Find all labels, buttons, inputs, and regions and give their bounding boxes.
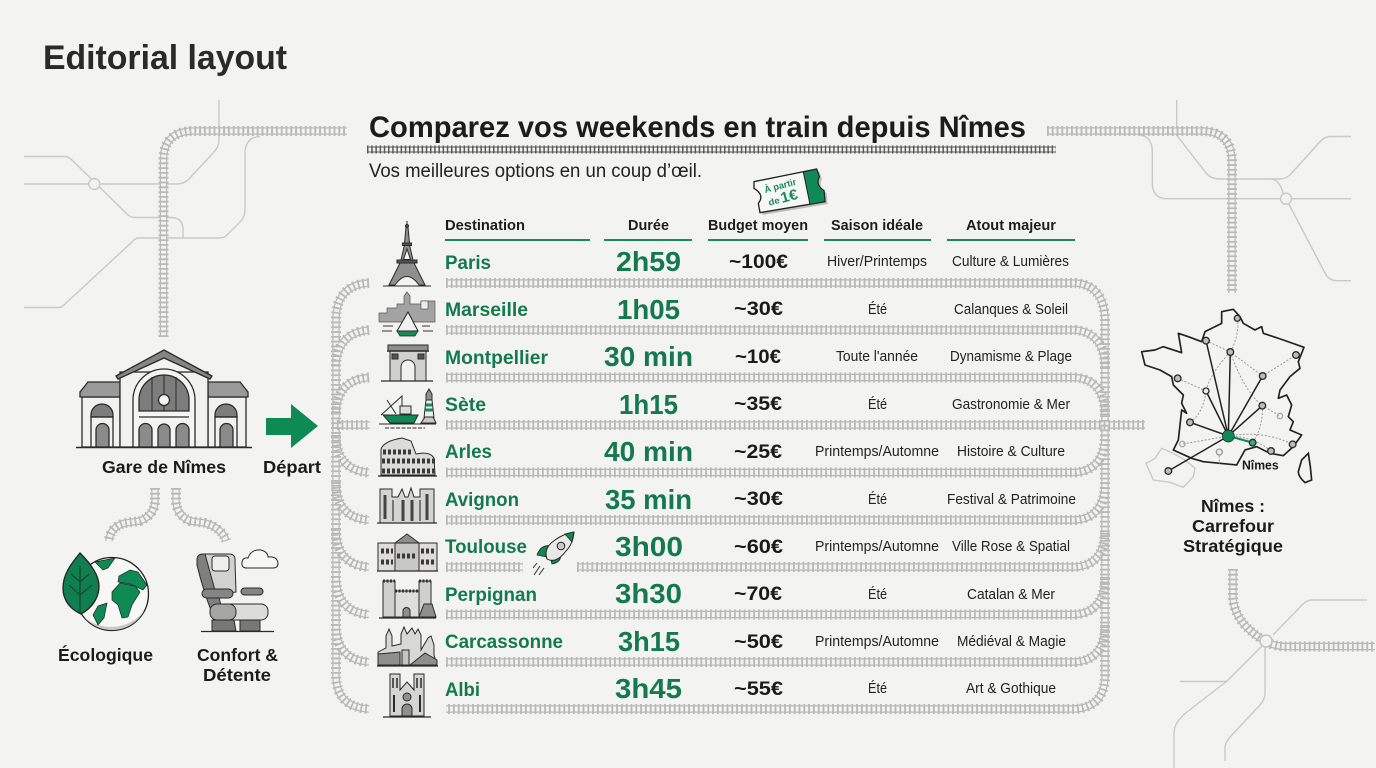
ticket badge: à partir de 1€: 1€ — [779, 187, 800, 207]
label: Écologique: Écologique — [58, 644, 153, 665]
row: Perpignan — [379, 578, 1055, 618]
icon: Gare de Nîmes station — [76, 350, 252, 448]
label: Départ: Départ — [263, 457, 321, 477]
ticket badge: à partir de 1€: À partir — [763, 177, 798, 195]
season: Été — [868, 680, 887, 697]
icon: triumphal arch — [381, 345, 433, 381]
table header: Atout majeur — [966, 217, 1056, 234]
icon: fishing boat and lighthouse — [379, 389, 436, 428]
highlight: Dynamisme & Plage — [950, 349, 1072, 365]
icon: Palais des Papes — [377, 488, 437, 523]
label: Gare de Nîmes: Gare de Nîmes — [102, 457, 226, 477]
highlight: Calanques & Soleil — [954, 302, 1068, 318]
neighbouring region outline — [1146, 448, 1195, 487]
budget: ~30€ — [734, 489, 783, 510]
season: Été — [868, 491, 887, 508]
row: Montpellier — [381, 341, 1072, 381]
highlight: Histoire & Culture — [957, 444, 1065, 460]
season: Été — [868, 586, 887, 603]
season: Hiver/Printemps — [827, 254, 927, 270]
destination name: Albi — [445, 680, 480, 701]
icon: medieval walled city — [377, 627, 438, 666]
destination name: Sète — [445, 395, 486, 416]
budget: ~60€ — [734, 537, 783, 558]
destination name: Toulouse — [445, 537, 527, 558]
row: Carcassonne — [377, 626, 1066, 666]
background transit network: top right — [1140, 100, 1351, 281]
destination name: Carcassonne — [445, 632, 563, 653]
icon: Marseille harbour and sailboat — [379, 292, 435, 336]
arrow: departure — [266, 404, 318, 448]
icon: leaf and globe — [63, 553, 148, 630]
destination name: Montpellier — [445, 348, 549, 369]
budget: ~30€ — [734, 299, 783, 320]
label: Confort & Détente: Confort & — [197, 645, 278, 665]
highlight: Art & Gothique — [966, 681, 1056, 697]
icon: Eiffel Tower — [383, 221, 431, 286]
title underline rail — [367, 146, 1056, 152]
heading: Editorial layout: Editorial layout — [43, 39, 287, 77]
highlight: Catalan & Mer — [967, 587, 1055, 603]
row: Marseille — [379, 292, 1068, 336]
row: Toulouse — [377, 531, 1070, 575]
ticket badge: à partir de 1€ — [754, 169, 828, 215]
budget: ~70€ — [734, 584, 782, 605]
season: Printemps/Automne — [815, 539, 939, 555]
row: Sète — [379, 389, 1070, 428]
background transit network: bottom right — [1174, 600, 1367, 768]
duration: 2h59 — [616, 246, 681, 277]
duration: 3h30 — [615, 578, 682, 609]
row: Arles — [378, 436, 1065, 476]
season: Toute l'année — [836, 349, 918, 365]
label: Confort & Détente: Détente — [203, 665, 271, 685]
Corsica outline — [1298, 453, 1312, 483]
duration: 40 min — [604, 436, 693, 467]
row: Albi — [383, 673, 1056, 717]
row: Paris — [383, 221, 1069, 286]
Nîmes hub node — [1222, 430, 1234, 442]
map label: Nîmes: Nîmes — [1242, 458, 1279, 472]
France outline — [1142, 309, 1304, 465]
budget: ~55€ — [734, 679, 783, 700]
duration: 1h15 — [619, 389, 678, 420]
label: Nîmes, Carrefour Stratégique: Stratégique — [1183, 536, 1283, 556]
icon: castle — [379, 581, 436, 618]
icon: train seat and cloud — [197, 550, 278, 632]
season: Été — [868, 301, 887, 318]
icon: cathedral — [383, 674, 431, 717]
duration: 3h45 — [615, 673, 682, 704]
label: Confort & Détente — [197, 645, 278, 685]
subtitle: Vos meilleures options en un coup d’œil. — [369, 161, 702, 182]
destination name: Marseille — [445, 300, 528, 321]
table header: Saison idéale — [831, 217, 923, 234]
season: Printemps/Automne — [815, 444, 939, 460]
season: Été — [868, 396, 887, 413]
label: Nîmes, Carrefour Stratégique — [1183, 496, 1283, 556]
duration: 35 min — [605, 484, 692, 515]
row: Avignon — [377, 484, 1076, 523]
budget: ~25€ — [734, 442, 782, 463]
table header — [445, 217, 1075, 240]
budget: ~100€ — [729, 252, 788, 273]
background transit network: top left — [24, 100, 260, 308]
icon: rocket — [533, 532, 574, 575]
highlight: Festival & Patrimoine — [947, 492, 1076, 508]
table header: Budget moyen — [708, 217, 808, 234]
label: Nîmes, Carrefour Stratégique: Nîmes : — [1201, 496, 1265, 516]
icon: Roman arena — [378, 438, 437, 476]
budget: ~35€ — [734, 394, 782, 415]
map: France rail network — [1142, 309, 1312, 487]
dashed secondary links — [1178, 318, 1296, 463]
destination name: Perpignan — [445, 585, 537, 606]
highlight: Médiéval & Magie — [957, 634, 1066, 650]
table header: Durée — [628, 217, 669, 234]
direct links from Nîmes — [1168, 341, 1263, 471]
label: Nîmes, Carrefour Stratégique: Carrefour — [1192, 516, 1274, 536]
link to the coast — [1228, 436, 1253, 443]
season: Printemps/Automne — [815, 634, 939, 650]
duration: 1h05 — [617, 294, 680, 325]
highlight: Gastronomie & Mer — [952, 397, 1070, 413]
icon: Capitole building — [377, 534, 438, 571]
duration: 3h15 — [618, 626, 680, 657]
highlight: Culture & Lumières — [952, 254, 1069, 270]
destination name: Arles — [445, 442, 492, 463]
budget: ~10€ — [735, 347, 781, 368]
destination name: Avignon — [445, 490, 519, 511]
table header: Destination — [445, 217, 525, 234]
railway tracks linking destination rows — [109, 131, 1375, 709]
highlight: Ville Rose & Spatial — [952, 539, 1070, 555]
city nodes — [1165, 315, 1299, 474]
title: main heading: Comparez vos weekends en train depuis Nîmes — [369, 111, 1026, 144]
junction: bottom right station — [1260, 635, 1272, 647]
ticket badge: à partir de 1€: de — [767, 195, 781, 208]
duration: 30 min — [604, 341, 693, 372]
budget: ~50€ — [734, 632, 783, 653]
duration: 3h00 — [615, 531, 683, 562]
destination name: Paris — [445, 253, 491, 274]
